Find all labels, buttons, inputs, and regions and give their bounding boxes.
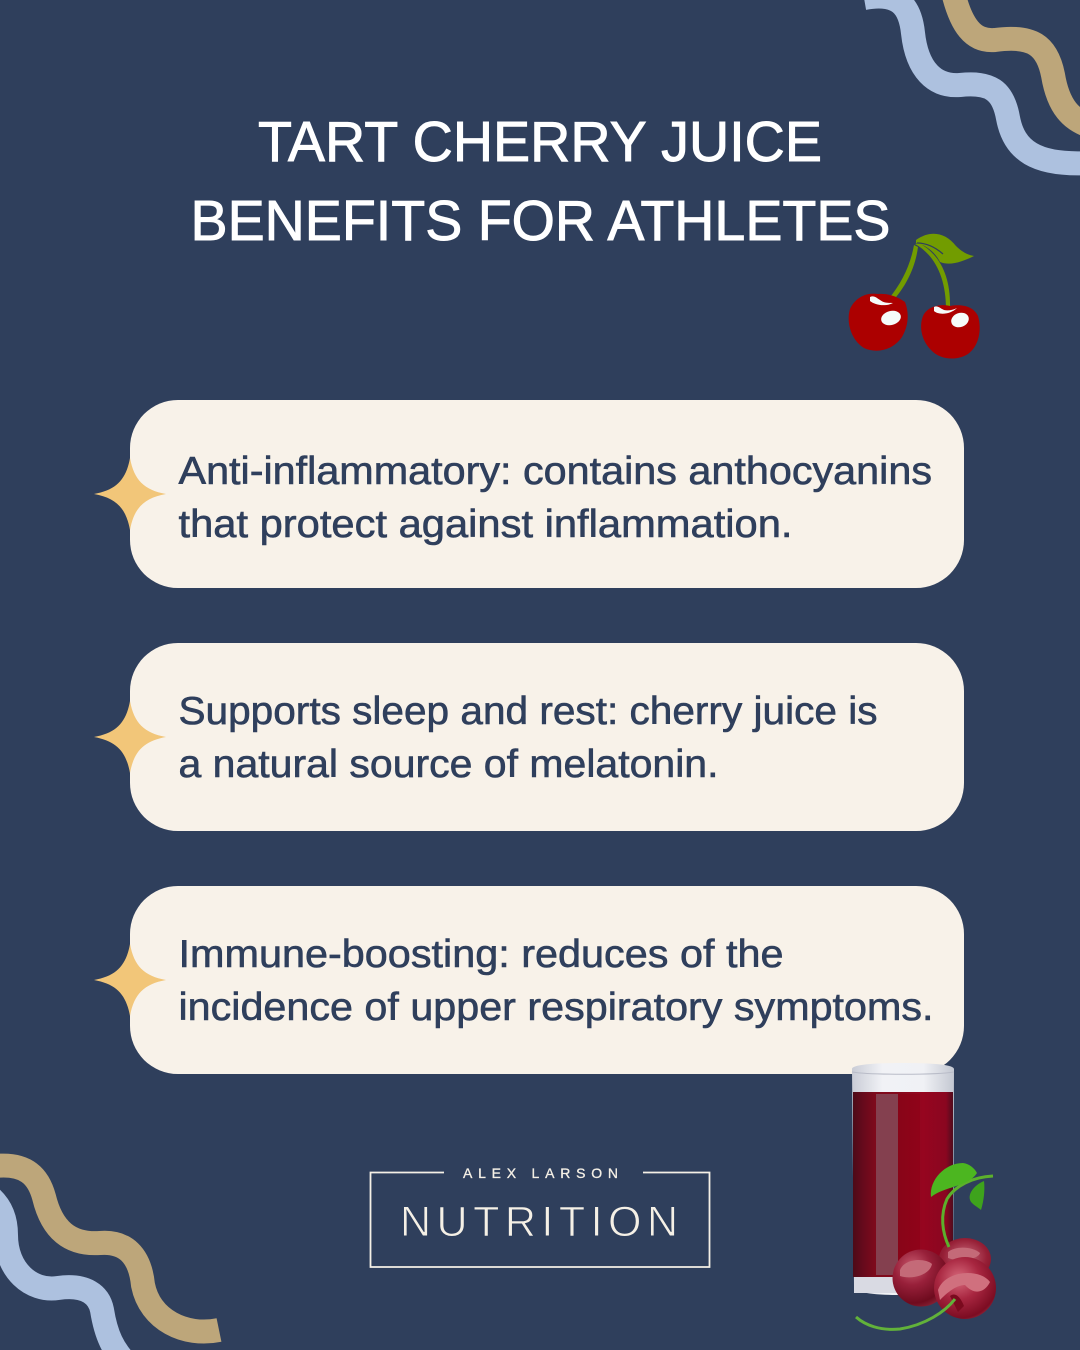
logo: [370, 1165, 710, 1267]
card 1: [94, 400, 964, 588]
sparkle icon 1: [94, 458, 166, 530]
card 1: that protect against inflammation.: [178, 503, 792, 546]
icon: cherries with leaf: [849, 234, 980, 359]
card 3: incidence of upper respiratory symptoms.: [178, 986, 933, 1029]
card 3: [94, 886, 964, 1074]
card 3: Immune-boosting: reduces of the: [178, 933, 784, 976]
card 2: [94, 643, 964, 831]
card 1: Anti-inflammatory: contains anthocyanins: [178, 450, 932, 493]
sparkle icon 3: [94, 944, 166, 1016]
title: BENEFITS FOR ATHLETES: [190, 189, 890, 253]
card 2: a natural source of melatonin.: [178, 743, 718, 786]
wave decoration: top right: [864, 0, 1080, 163]
stem and leaves: [856, 1163, 993, 1329]
sparkle icon 2: [94, 701, 166, 773]
wave decoration: bottom left: [0, 1166, 219, 1350]
logo: ALEX LARSON: [463, 1165, 618, 1181]
glass: [852, 1063, 954, 1295]
illustration: glass of cherry juice with cherries: [852, 1063, 996, 1329]
title: [190, 110, 890, 253]
card 2: Supports sleep and rest: cherry juice is: [178, 690, 878, 733]
logo: NUTRITION: [400, 1198, 678, 1246]
title: TART CHERRY JUICE: [258, 110, 822, 174]
cherries: [892, 1238, 996, 1319]
